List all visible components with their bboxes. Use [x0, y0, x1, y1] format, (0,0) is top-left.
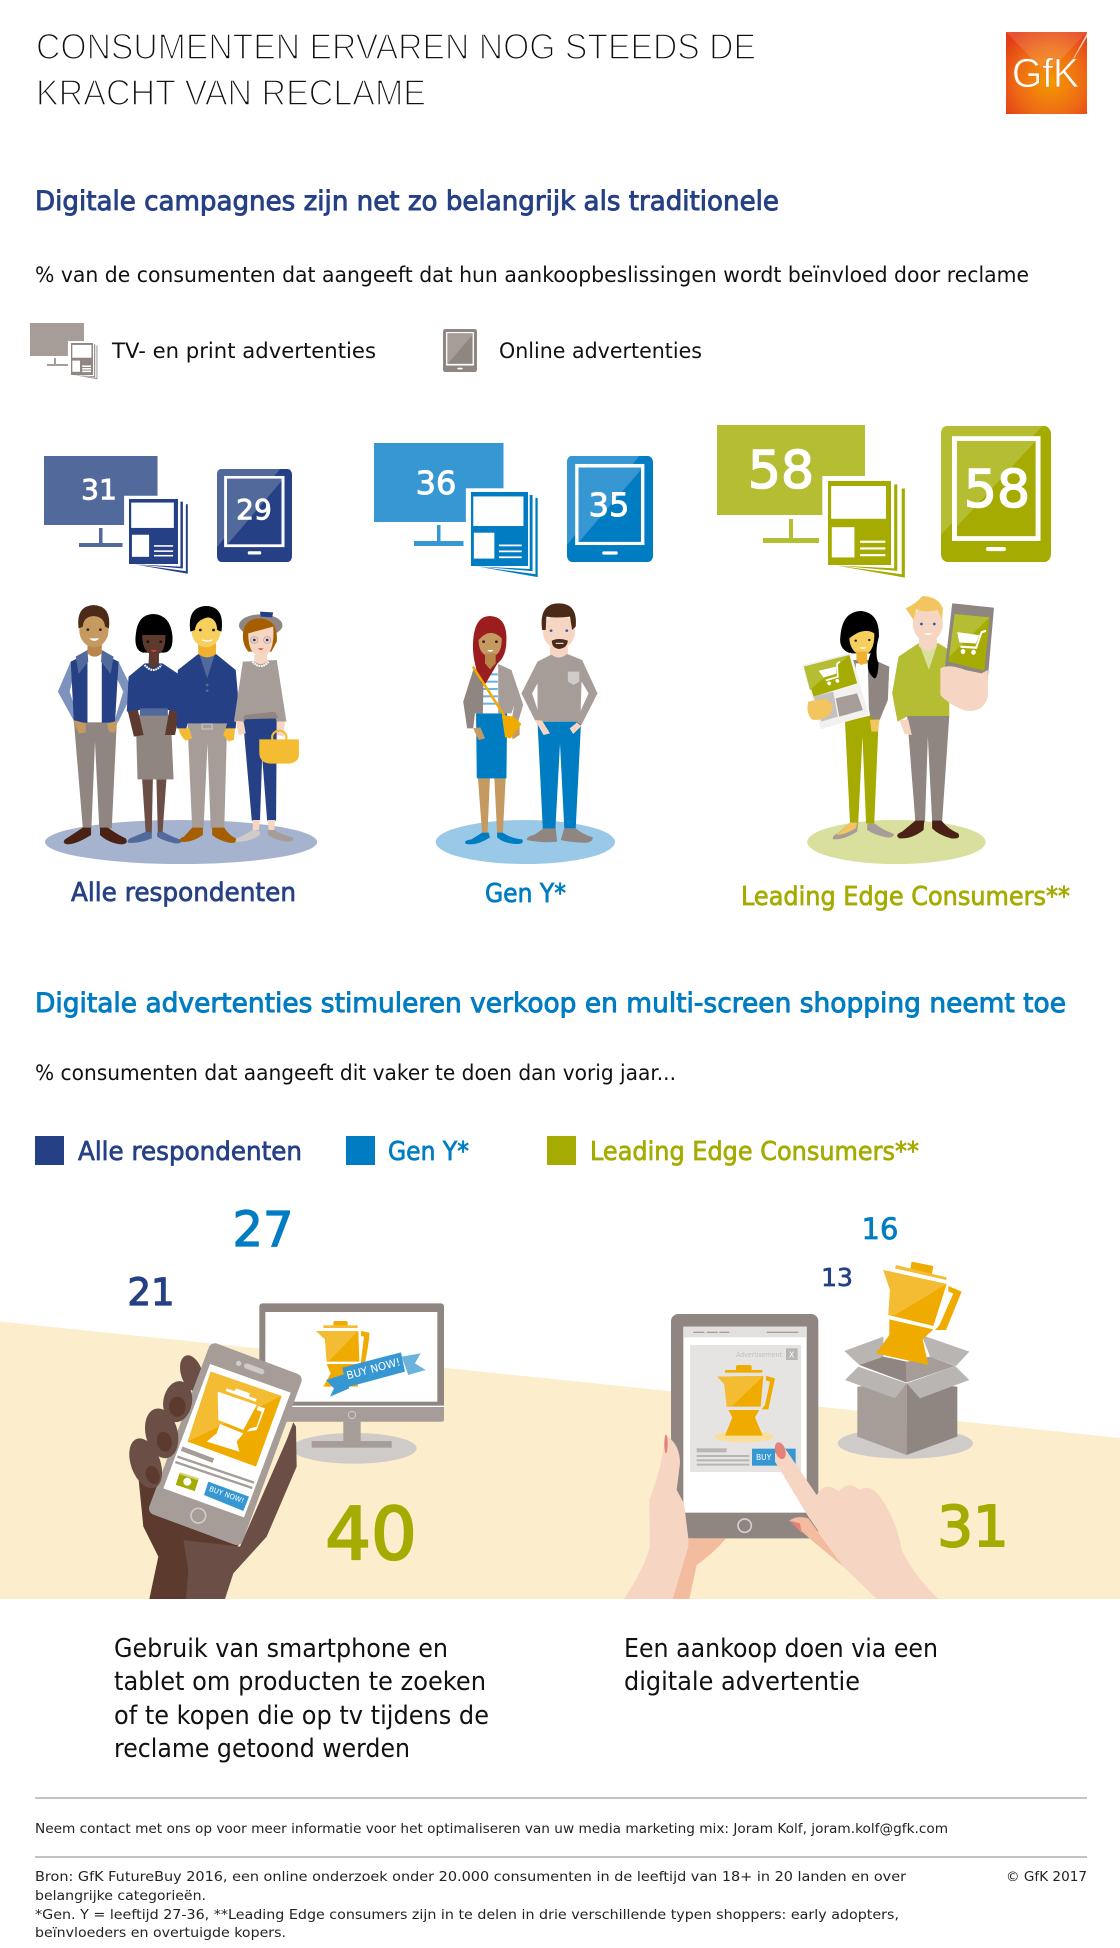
text block: smartphone caption: Gebruik van smartphone en [114, 1634, 448, 1664]
panel: alle respondenten media scores [44, 456, 292, 574]
label: leading edge consumers: Leading Edge Consumers** [741, 882, 1070, 912]
icon: print stack [822, 476, 905, 578]
text block: purchase caption: digitale advertentie [624, 1667, 860, 1697]
number: 16: 16 [862, 1212, 898, 1246]
legend: audiences [35, 1136, 919, 1167]
heading: section 1: Digitale campagnes zijn net zo belangrijk als traditionele [35, 186, 779, 217]
icon: print stack [124, 496, 188, 574]
icon: tablet 35 [567, 456, 653, 562]
icon: grey monitor and print [30, 323, 97, 379]
logo: GfK: GfK [1012, 50, 1079, 96]
text block: smartphone caption: reclame getoond werden [114, 1734, 410, 1764]
legend label: online: Online advertenties [499, 339, 702, 363]
title [36, 26, 756, 113]
icon: tablet with advertisement: X [789, 1350, 795, 1359]
icon: monitor 36 [374, 443, 504, 546]
icon: monitor 31: 31 [81, 473, 117, 506]
newspaper [802, 653, 869, 729]
icon: grey tablet [443, 329, 477, 372]
icon: tablet 29 [217, 469, 292, 562]
text block: smartphone caption [114, 1634, 489, 1764]
legend label: TV and print: TV- en print advertenties [111, 339, 376, 363]
subtitle: section 2: % consumenten dat aangeeft dit vaker te doen dan vorig jaar... [35, 1061, 676, 1085]
legend item: alle respondenten: Alle respondenten [78, 1137, 302, 1167]
shadow [807, 820, 986, 864]
number: 40: 40 [325, 1492, 417, 1576]
icon: open box with blender [838, 1262, 973, 1459]
icon: monitor 36: 36 [416, 464, 456, 502]
source notes: belangrijke categorieën. [35, 1888, 206, 1904]
icon: dark hand holding phone [123, 1350, 297, 1599]
heading: section 2: Digitale advertenties stimuleren verkoop en multi-screen shopping neemt toe [35, 988, 1066, 1019]
text block: smartphone caption: tablet om producten te zoeken [114, 1667, 486, 1697]
icon: print stack [466, 488, 538, 577]
icon: tablet 29: 29 [236, 493, 272, 526]
icon: tablet 35: 35 [589, 486, 629, 524]
icon: monitor 58: 58 [748, 441, 814, 501]
icon: left hand [624, 1435, 726, 1599]
icon: tv monitor with ad [259, 1303, 444, 1464]
icon: tablet with advertisement: Advertisement [736, 1350, 782, 1359]
phone [946, 604, 993, 682]
person: man with beard [521, 603, 597, 843]
contact line: Neem contact met ons op voor meer informatie voor het optimaliseren van uw media marketing mix: Joram Kolf, joram.kolf@gfk.com [35, 1821, 948, 1837]
label: gen y: Gen Y* [485, 879, 566, 909]
text block: purchase caption [624, 1634, 938, 1697]
person: man in vest [58, 605, 133, 844]
number: 31: 31 [937, 1495, 1009, 1560]
source notes: beïnvloeders en overtuigde kopers. [35, 1925, 286, 1941]
source notes: Bron: GfK FutureBuy 2016, een online onderzoek onder 20.000 consumenten in de leeftijd van 18+ in 20 landen en over [35, 1869, 906, 1885]
beige background band [0, 1322, 1120, 1599]
subtitle: section 1: % van de consumenten dat aangeeft dat hun aankoopbeslissingen wordt beïnvloed door reclame [35, 263, 1029, 287]
person: woman with red hair [463, 616, 523, 844]
number: 13: 13 [821, 1263, 853, 1292]
icon: tablet with advertisement: BUY [756, 1453, 771, 1462]
label: alle respondenten: Alle respondenten [71, 878, 296, 908]
illustration: tablet and box [624, 1262, 973, 1599]
icon: right hand pointing [773, 1441, 938, 1599]
text block: purchase caption: Een aankoop doen via een [624, 1634, 938, 1664]
number: 21: 21 [127, 1271, 175, 1314]
title: CONSUMENTEN ERVAREN NOG STEEDS DE [36, 26, 756, 67]
illustration: leading edge people [802, 596, 993, 864]
banner: buy now [326, 1352, 426, 1397]
source notes [35, 1869, 906, 1941]
person: man with phone [892, 596, 993, 838]
icon: dark hand holding phone: BUY NOW! [208, 1485, 245, 1505]
illustration: gen y people [436, 603, 615, 864]
legend item: gen y [346, 1136, 469, 1167]
logo: GfK [1006, 32, 1087, 114]
icon: monitor 31 [44, 456, 158, 547]
icon: tablet with advertisement [671, 1314, 818, 1538]
illustration: phone and tv [123, 1303, 444, 1599]
legend: media types [30, 323, 702, 379]
copyright: © GfK 2017 [1006, 1869, 1087, 1885]
person: woman in navy top [127, 614, 181, 843]
legend item: gen y: Gen Y* [388, 1137, 469, 1167]
panel: gen y media scores [374, 443, 653, 577]
shadow [45, 820, 317, 864]
source notes: *Gen. Y = leeftijd 27-36, **Leading Edge consumers zijn in te delen in drie verschillende typen shoppers: early adopters, [35, 1907, 899, 1923]
number: 27: 27 [232, 1202, 294, 1258]
person: woman with hat and bag [234, 612, 299, 842]
shadow [436, 820, 615, 864]
icon: tablet 58 [941, 426, 1051, 562]
icon: tablet 58: 58 [964, 460, 1030, 520]
illustration: alle respondenten people [45, 605, 317, 864]
person: man in navy sweater [177, 606, 238, 843]
person: woman with newspaper [802, 611, 894, 839]
panel: leading edge media scores [717, 425, 1051, 578]
banner: buy now: BUY NOW! [345, 1355, 402, 1382]
icon: monitor 58 [717, 425, 865, 543]
text block: smartphone caption: of te kopen die op tv tijdens de [114, 1701, 489, 1731]
legend item: leading edge: Leading Edge Consumers** [590, 1137, 919, 1167]
title: KRACHT VAN RECLAME [36, 72, 426, 113]
